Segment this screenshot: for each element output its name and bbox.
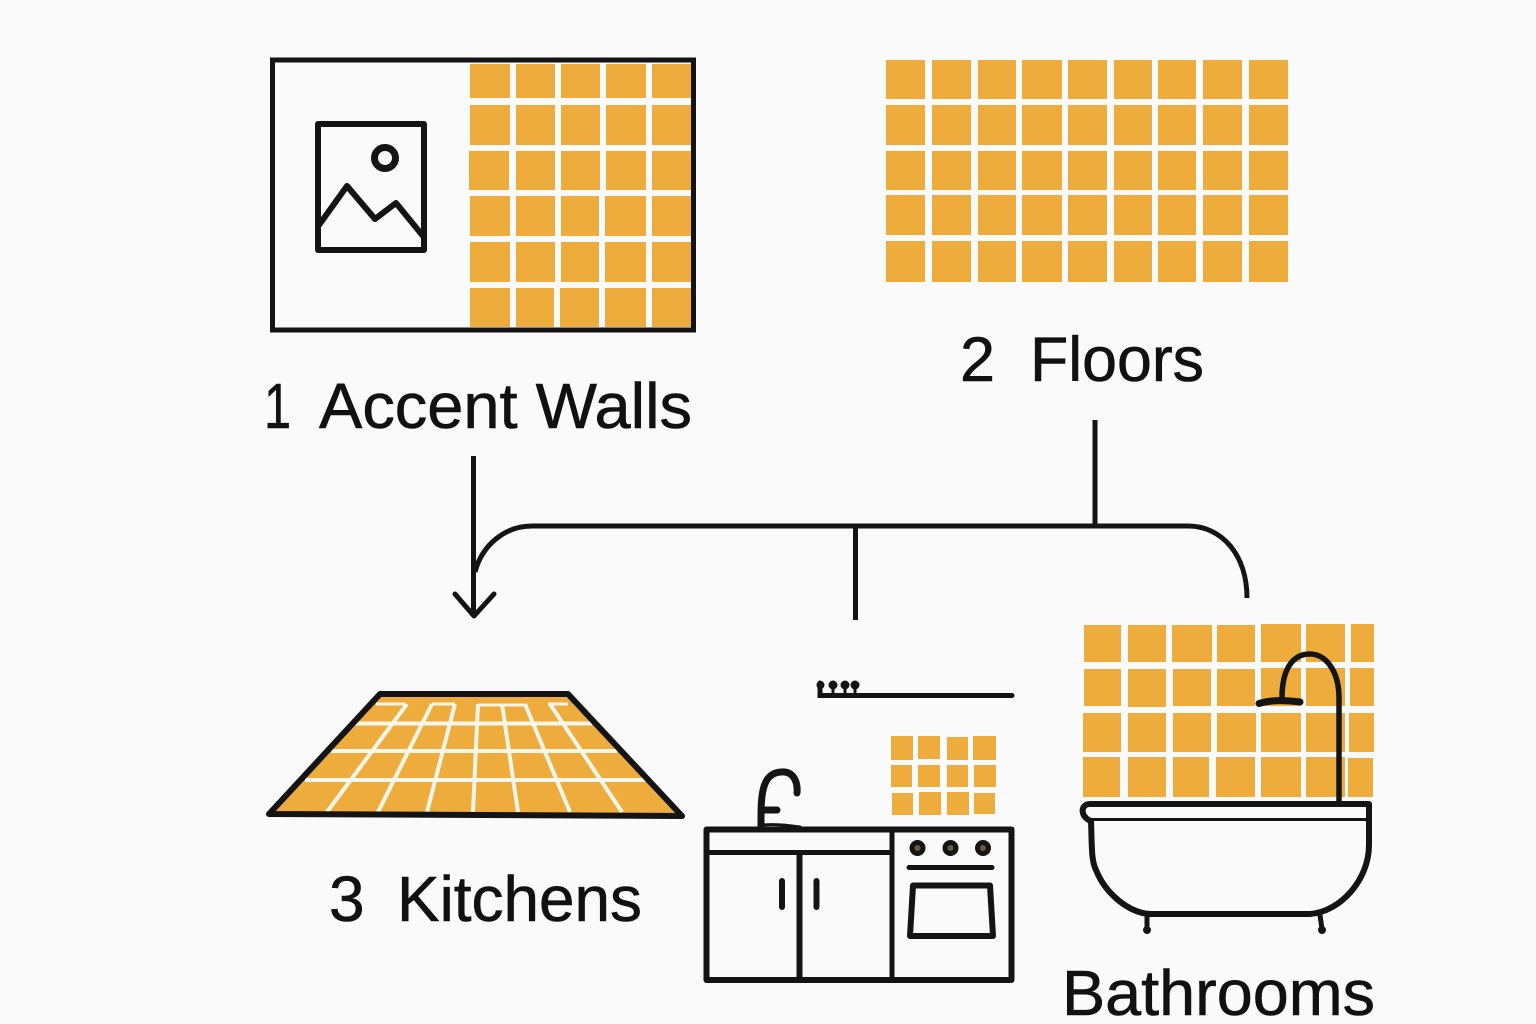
icon: wall shelf with hooks xyxy=(818,682,1012,696)
label: 1 Accent Walls: Accent Walls xyxy=(319,370,692,442)
connector: branching tree with arrow xyxy=(455,420,1247,620)
label: 2 Floors: Floors xyxy=(1030,325,1204,395)
panel: kitchen illustration xyxy=(706,682,1012,980)
panel: bathroom illustration xyxy=(1083,624,1374,932)
panel: accent wall illustration xyxy=(272,60,694,330)
tile grout lines xyxy=(305,704,645,812)
label: 2 Floors: 2 xyxy=(960,325,995,395)
bathroom wall tiles xyxy=(1083,624,1374,797)
icon: framed picture xyxy=(318,124,424,250)
backsplash tiles xyxy=(891,736,996,815)
icon: bathtub xyxy=(1083,804,1369,932)
cabinets xyxy=(706,829,1012,980)
icon: shower pipe and head xyxy=(1259,654,1339,803)
label: 1 Accent Walls: 1 xyxy=(264,370,291,442)
icon: faucet xyxy=(761,772,800,827)
panel: perspective tiled floor xyxy=(269,694,682,816)
panel: floor tiles xyxy=(886,60,1288,282)
floor outline xyxy=(269,694,682,816)
label: 3 Kitchens: 3 xyxy=(329,863,365,935)
icon: oven xyxy=(909,842,993,936)
accent wall tiles xyxy=(469,64,691,327)
wall frame xyxy=(272,60,694,330)
label: 3 Kitchens: Kitchens xyxy=(397,863,642,935)
